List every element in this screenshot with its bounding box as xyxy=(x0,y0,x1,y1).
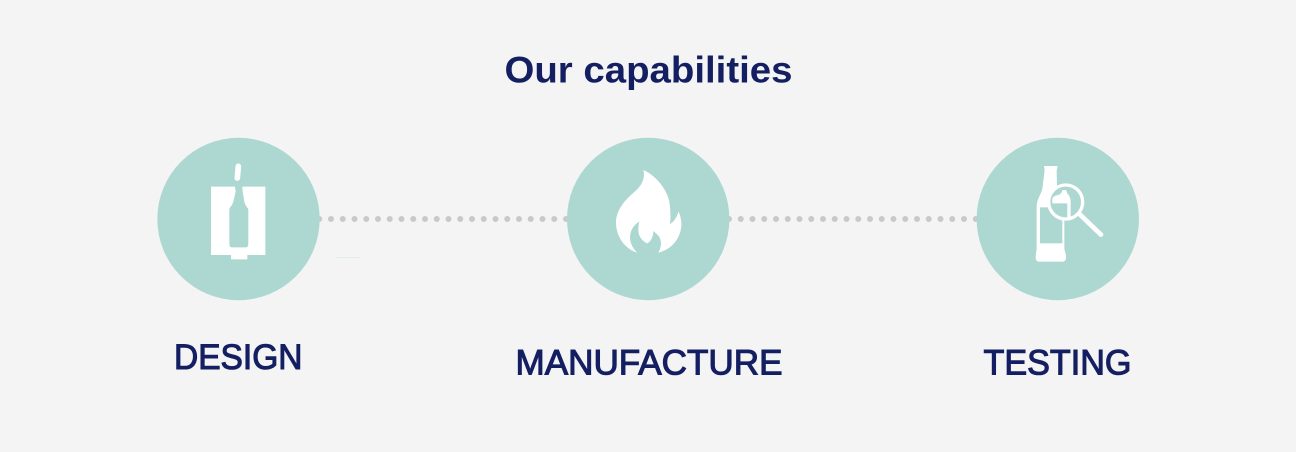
dotted connector: design to manufacture xyxy=(319,216,570,222)
label: manufacture: MANUFACTURE xyxy=(516,342,782,382)
icon: flame xyxy=(567,138,729,300)
icon: bottle under magnifying glass xyxy=(977,138,1139,300)
title: Our capabilities xyxy=(504,50,792,90)
dotted connector: manufacture to testing xyxy=(729,216,980,222)
stray faint mark xyxy=(336,257,360,258)
icon: design mould xyxy=(157,138,320,300)
label: design: DESIGN xyxy=(174,337,302,377)
label: testing: TESTING xyxy=(984,342,1132,382)
